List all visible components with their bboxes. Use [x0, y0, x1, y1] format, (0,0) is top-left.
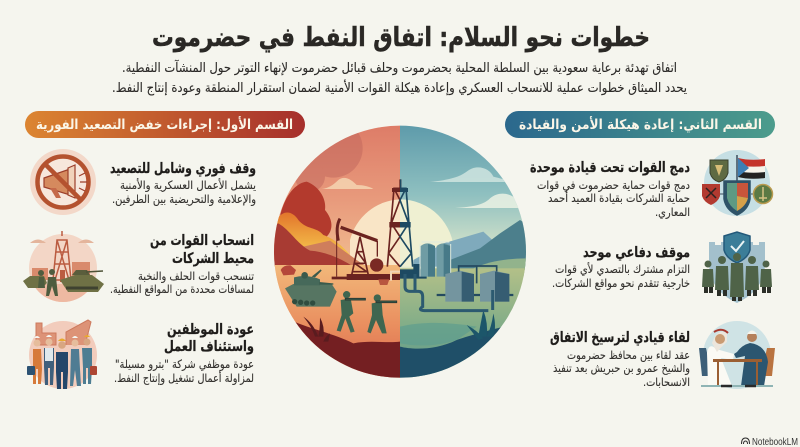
section header: part two	[505, 111, 775, 138]
text: leadership meeting	[550, 330, 690, 389]
derrick left half	[387, 188, 400, 267]
text: unified defensive position: خارجية تتقدم نحو مواقع الشركات.	[552, 276, 690, 291]
intro text block: يحدد الميثاق خطوات عملية للانسحاب العسكري وإعادة هيكلة القوات الأمنية لضمان استقرار المنطقة وعودة إنتاج النفط.	[112, 79, 687, 96]
text: immediate ceasefire: يشمل الأعمال العسكرية والأمنية	[120, 178, 256, 193]
section header: part two: القسم الثاني: إعادة هيكلة الأمن والقيادة	[519, 116, 762, 133]
mountains	[304, 240, 364, 265]
tall silos	[420, 242, 451, 277]
smoke clouds	[296, 133, 362, 189]
pipelines	[405, 274, 488, 311]
text: withdrawal of forces	[110, 233, 254, 297]
text: immediate ceasefire: وقف فوري وشامل للتصعيد	[110, 161, 256, 178]
text: unify forces: دمج قوات حماية حضرموت في قوات	[537, 178, 690, 193]
text: withdrawal of forces: انسحاب القوات من	[150, 233, 254, 249]
text: unify forces	[530, 160, 690, 220]
text: return of employees	[114, 322, 254, 386]
text: withdrawal of forces: لمسافات محددة من المواقع النفطية.	[110, 282, 254, 297]
section header: part one	[25, 111, 305, 138]
icon: flag, shield and unit badges	[702, 150, 772, 216]
intro text block	[112, 59, 687, 96]
text: withdrawal of forces: تنسحب قوات الحلف والنخبة	[138, 269, 254, 284]
text: unify forces: حماية الشركات بقيادة العميد أحمد	[548, 190, 690, 206]
text: withdrawal of forces: محيط الشركات	[172, 251, 254, 267]
text: unify forces: دمج القوات تحت قيادة موحدة	[530, 160, 690, 176]
icon: tanks withdrawing from oil site	[23, 231, 104, 304]
icon: leaders meeting at a table	[699, 321, 775, 389]
derrick right half	[400, 188, 413, 267]
text: immediate ceasefire: والإعلامية والتحريضية بين الطرفين.	[112, 192, 256, 207]
plants	[303, 317, 330, 342]
ground	[274, 265, 400, 378]
text: unified defensive position: موقف دفاعي موحد	[583, 245, 690, 261]
foreground dunes	[296, 322, 400, 378]
text: leadership meeting: عقد لقاء بين محافظ حضرموت	[567, 348, 690, 363]
soldiers	[337, 291, 397, 333]
fire	[280, 182, 332, 236]
text: leadership meeting: الانسحابات.	[643, 375, 690, 389]
text: immediate ceasefire	[110, 161, 256, 207]
far wreck	[281, 265, 296, 275]
text: return of employees: عودة الموظفين	[167, 322, 254, 338]
text: unified defensive position	[552, 245, 690, 291]
tank vehicle	[285, 269, 337, 307]
text: unified defensive position: التزام مشترك بالتصدي لأي قوات	[555, 262, 690, 277]
text: leadership meeting: والشيخ عمرو بن حبريش بعد تنفيذ	[553, 361, 690, 376]
storage tanks	[437, 266, 513, 302]
icon: soldiers and defence shield	[702, 232, 772, 303]
text: unify forces: المعاري.	[655, 205, 690, 220]
text: leadership meeting: لقاء قيادي لترسيخ الاتفاق	[550, 330, 690, 347]
crate and pipes on red side	[378, 279, 389, 285]
sun	[350, 199, 400, 267]
title: خطوات نحو السلام: اتفاق النفط في حضرموت	[152, 23, 650, 53]
text: return of employees: عودة موظفي شركة "بترو مسيلة"	[115, 357, 254, 372]
section header: part one: القسم الأول: إجراءات خفض التصعيد الفورية	[36, 116, 293, 133]
pumpjack	[337, 219, 377, 277]
text: return of employees: لمزاولة أعمال تشغيل وإنتاج النفط.	[114, 370, 254, 386]
icon: returning oil workers	[27, 320, 97, 389]
text: return of employees: واستئناف العمل	[164, 339, 254, 355]
intro text block: اتفاق تهدئة برعاية سعودية بين السلطة المحلية بحضرموت وحلف قبائل حضرموت لإنهاء التوتر حول المنشآت النفطية.	[122, 59, 677, 76]
icon: banned megaphone	[30, 149, 96, 215]
central illustration: war and oil landscape	[270, 119, 530, 390]
cream clouds	[322, 178, 373, 189]
sky halves	[270, 120, 400, 387]
